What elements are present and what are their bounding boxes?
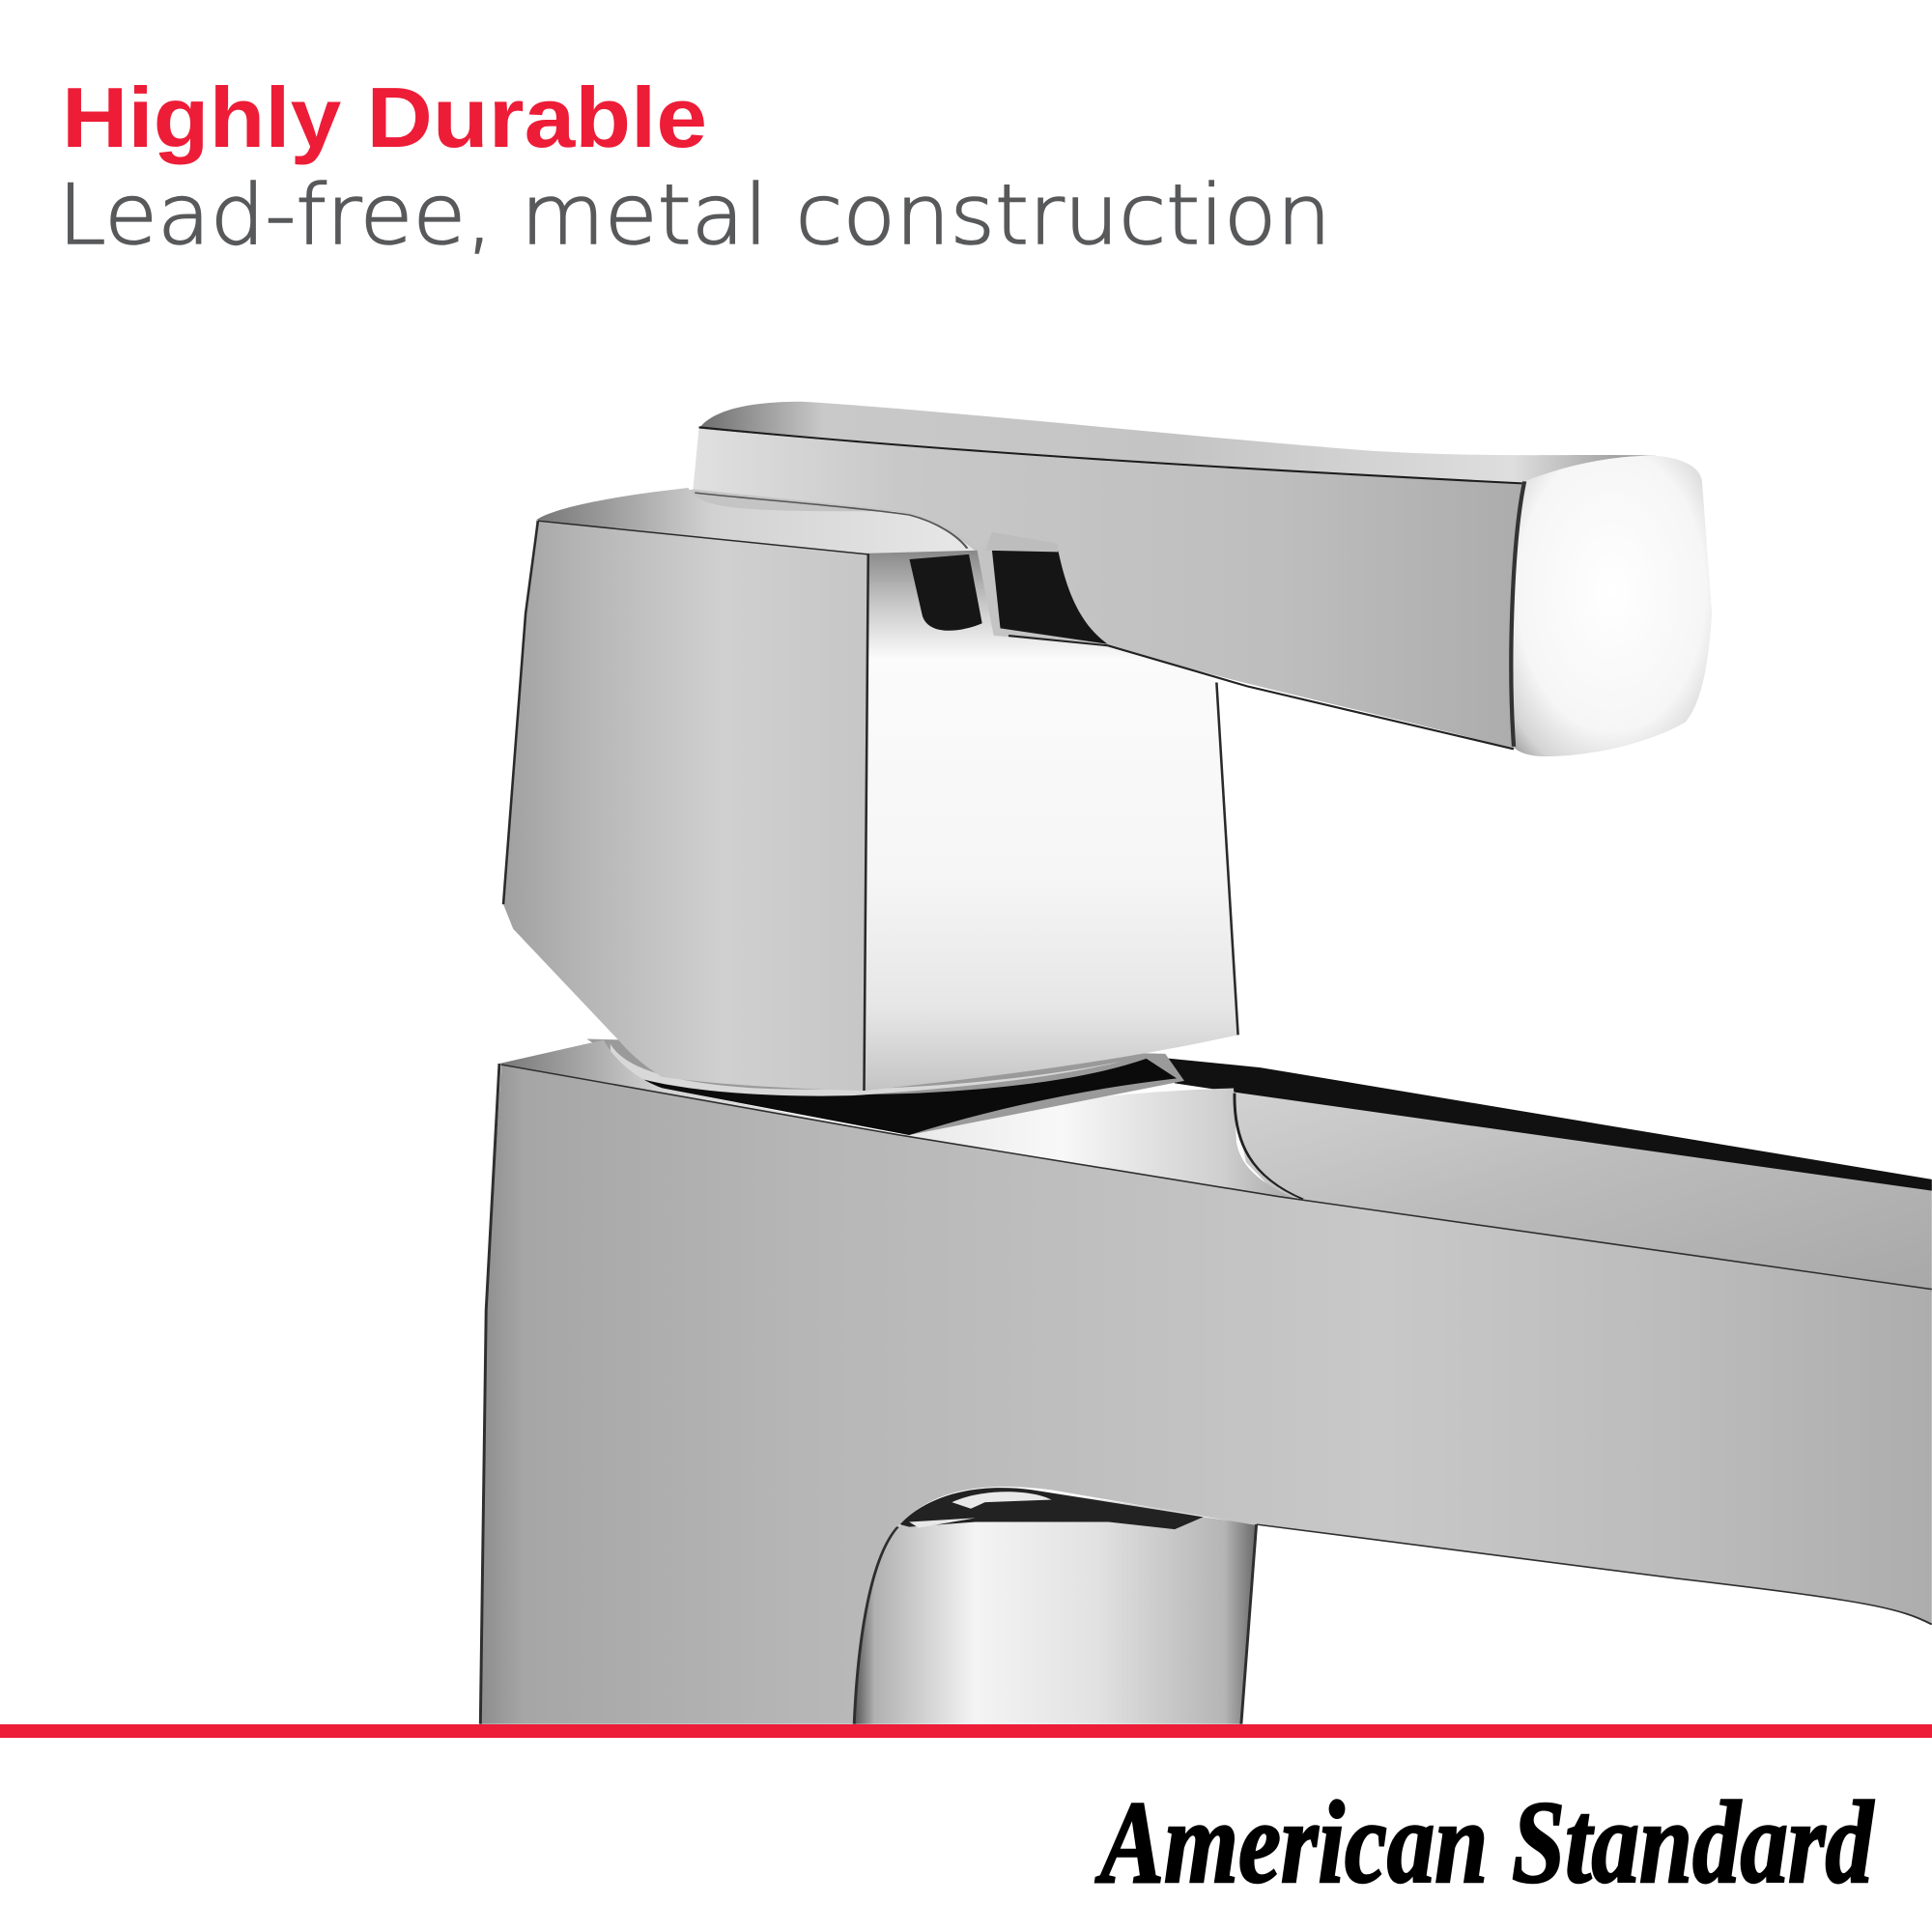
title: Highly Durable: Highly Durable bbox=[62, 70, 707, 165]
handle body left face bbox=[503, 521, 868, 1091]
base ring dark crescent bbox=[596, 1059, 1177, 1135]
faucet illustration bbox=[480, 402, 1932, 1724]
main body and spout bbox=[480, 1064, 1932, 1724]
handle body dark reflection bbox=[909, 554, 982, 631]
lever top edge line bbox=[699, 427, 1522, 483]
lever main face bbox=[694, 429, 1523, 749]
faucet handle bbox=[503, 402, 1712, 1091]
subtitle: Lead-free, metal construction: Lead-free, metal construction bbox=[58, 167, 1331, 264]
neck highlight bbox=[899, 1089, 1303, 1202]
lever slot line bbox=[695, 493, 967, 549]
lever notch top bbox=[985, 532, 1058, 552]
base ring backing bbox=[586, 1039, 1184, 1135]
red divider line bbox=[0, 1724, 1932, 1738]
spout top dark reflection bbox=[1147, 1056, 1932, 1191]
lever end cap bbox=[1511, 456, 1712, 756]
end cap edge bbox=[1511, 481, 1524, 747]
lever lower edge line bbox=[1009, 636, 1514, 749]
under-spout arch bbox=[854, 1494, 1257, 1724]
body top face bbox=[499, 1040, 899, 1135]
spout rear surface bbox=[1165, 1059, 1932, 1293]
faucet spout and body bbox=[480, 1039, 1932, 1724]
body outline strokes bbox=[480, 1064, 1932, 1724]
handle edge lines bbox=[503, 521, 1238, 1091]
handle body right face bbox=[865, 551, 1238, 1091]
neck shadow line bbox=[1235, 1094, 1303, 1199]
base ring highlight bbox=[611, 1044, 1122, 1096]
handle backing bbox=[503, 429, 1238, 1091]
arch highlight bbox=[909, 1492, 1051, 1528]
body top face bbox=[536, 488, 978, 554]
lever top surface bbox=[699, 402, 1657, 483]
arch dark reflection bbox=[899, 1488, 1204, 1529]
lever notch dark shape bbox=[992, 551, 1108, 644]
